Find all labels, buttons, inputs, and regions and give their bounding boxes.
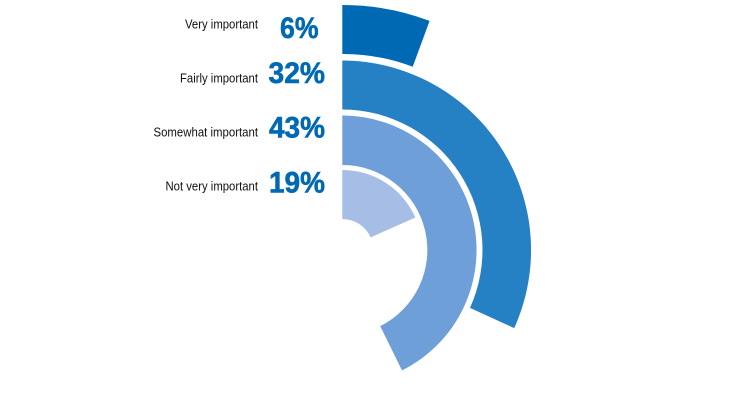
ring: fairly important 32%: [342, 60, 531, 328]
value: 6%: 6%: [280, 12, 318, 45]
value: 43%: 43%: [269, 112, 325, 144]
ring: not very important 19%: [342, 170, 415, 237]
value: 32%: 32%: [268, 57, 325, 90]
value: 19%: 19%: [269, 166, 325, 200]
chart rings: [342, 5, 531, 370]
label: not very important: Not very important: [166, 180, 258, 194]
label: very important: Very important: [185, 18, 258, 32]
label: fairly important: Fairly important: [180, 72, 258, 86]
ring: very important 6%: [342, 5, 430, 67]
ring: somewhat important 43%: [342, 116, 477, 370]
label: somewhat important: Somewhat important: [154, 126, 258, 140]
